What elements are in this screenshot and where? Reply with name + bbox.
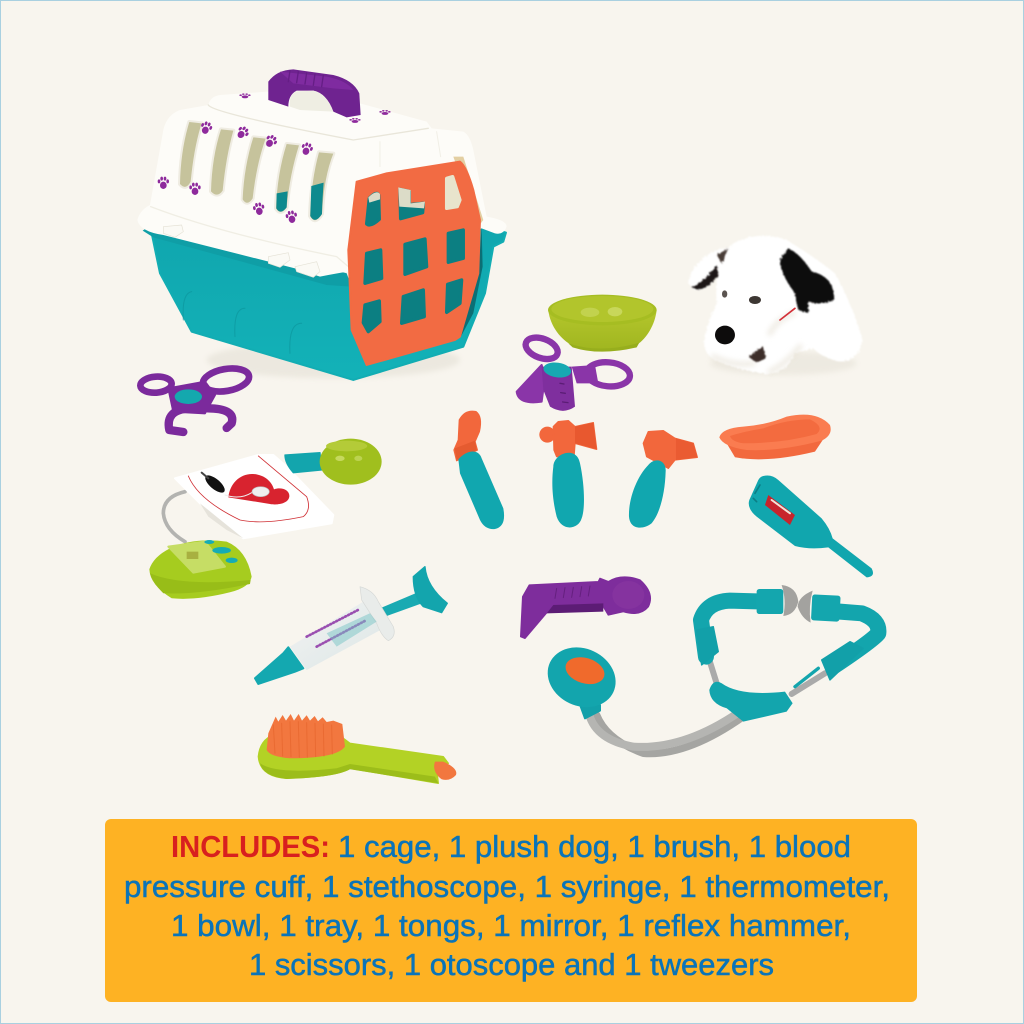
cage side slots xyxy=(180,122,333,220)
line two: pressure cuff, 1 stethoscope, 1 syringe, 1 thermometer, xyxy=(124,869,890,904)
door windows xyxy=(363,177,463,332)
cuff bulb xyxy=(285,439,382,485)
thermometer xyxy=(749,475,873,577)
includes text xyxy=(124,829,890,982)
stethoscope teal frame xyxy=(701,601,878,667)
panel background xyxy=(105,819,917,1002)
syringe xyxy=(255,567,447,684)
mirror tool xyxy=(454,411,504,529)
left column toys xyxy=(140,365,456,783)
cage clips xyxy=(163,225,320,277)
includes label: INCLUDES: xyxy=(171,829,330,864)
stethoscope silver ball joint xyxy=(782,585,798,616)
includes panel xyxy=(105,819,917,1002)
cage orange door xyxy=(453,157,483,227)
cage white lid xyxy=(137,92,507,277)
green bowl xyxy=(548,295,657,352)
blood pressure cuff xyxy=(163,455,333,542)
line one: 1 cage, 1 plush dog, 1 brush, 1 blood xyxy=(338,829,851,864)
reflex hammer xyxy=(539,421,597,527)
brush xyxy=(258,714,456,783)
pet carrier cage xyxy=(137,69,507,380)
right upper toys xyxy=(517,236,863,528)
scissors xyxy=(517,334,631,411)
stethoscope gray tube xyxy=(597,715,743,754)
line three: 1 bowl, 1 tray, 1 tongs, 1 mirror, 1 reflex hammer, xyxy=(171,908,851,943)
otoscope xyxy=(629,431,697,528)
cage teal base xyxy=(152,227,506,380)
cage paw prints xyxy=(158,93,391,224)
right lower toys xyxy=(521,475,878,754)
dog shading xyxy=(713,313,800,372)
stethoscope xyxy=(538,585,878,754)
blood pressure monitor xyxy=(149,540,252,599)
stethoscope chest piece xyxy=(578,700,600,718)
cage purple handle xyxy=(268,69,361,117)
tongs xyxy=(140,365,251,432)
plush dog xyxy=(688,236,863,375)
line four: 1 scissors, 1 otoscope and 1 tweezers xyxy=(249,947,774,982)
orange tray xyxy=(719,415,831,459)
purple mirror tool xyxy=(521,577,650,638)
